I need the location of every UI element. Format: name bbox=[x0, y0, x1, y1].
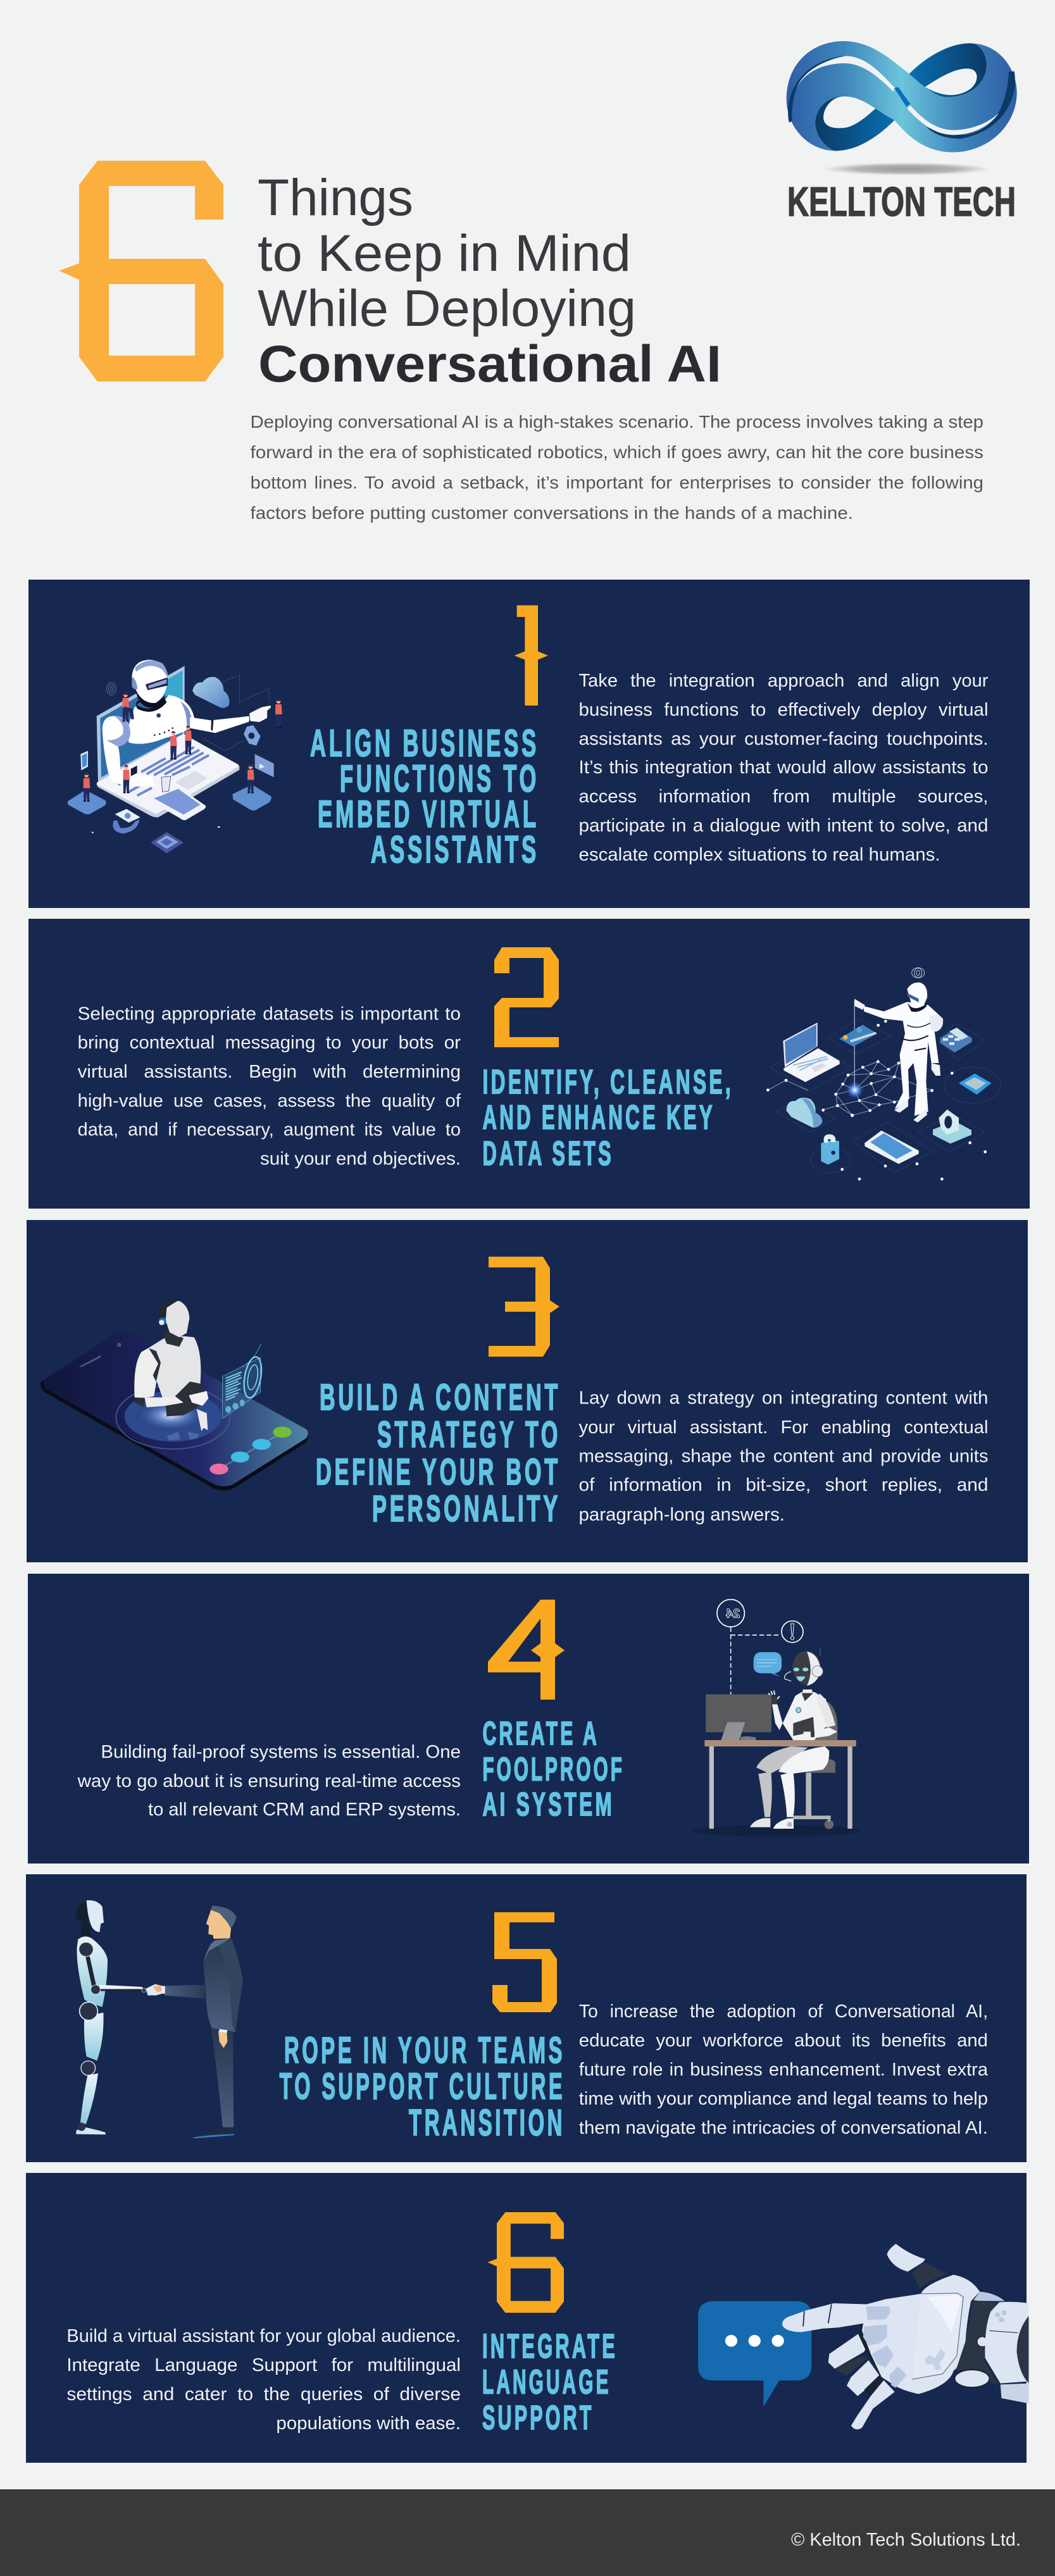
heading 6 bbox=[482, 2327, 618, 2437]
title: Conversational AI bbox=[258, 335, 721, 393]
intro paragraph: forward in the era of sophisticated robotics, which if goes awry, can hit the core business bbox=[251, 442, 983, 462]
body text 4: Building fail-proof systems is essential. One bbox=[101, 1742, 461, 1762]
heading 5: ROPE IN YOUR TEAMS bbox=[284, 2030, 565, 2071]
icon: robot hand bbox=[782, 2244, 1028, 2429]
illustration: robot at desk bbox=[692, 1600, 861, 1837]
illustration: robot with data network bbox=[766, 968, 1001, 1181]
panel 3: build a content strategy bbox=[27, 1220, 1028, 1562]
body text 2 bbox=[78, 1004, 461, 1169]
body text 2: bring contextual messaging to your bots or bbox=[78, 1033, 461, 1053]
body text 5: future role in business enhancement. Invest extra bbox=[579, 2060, 989, 2080]
heading 3: DEFINE YOUR BOT bbox=[316, 1452, 561, 1493]
heading 1 bbox=[310, 722, 539, 871]
body text 2: suit your end objectives. bbox=[260, 1149, 461, 1169]
intro paragraph: factors before putting customer conversations in the hands of a machine. bbox=[251, 503, 853, 523]
body text 3: messaging, shape the content and provide units bbox=[578, 1447, 989, 1467]
body text 1: It’s this integration that would allow assistants to bbox=[578, 757, 989, 778]
body text 3: Lay down a strategy on integrating content with bbox=[578, 1388, 989, 1409]
logo shadow bbox=[823, 163, 990, 175]
number 4 bbox=[488, 1600, 565, 1700]
heading 4: FOOLPROOF bbox=[482, 1752, 625, 1788]
footer bbox=[0, 2489, 1055, 2576]
body text 5 bbox=[579, 2001, 989, 2138]
body text 6: Integrate Language Support for multilingual bbox=[66, 2355, 461, 2375]
heading 3 bbox=[316, 1377, 561, 1529]
body text 2: high-value use cases, assess the quality of bbox=[78, 1091, 461, 1111]
body text 1: assistants as your customer-facing touchpoints. bbox=[578, 729, 989, 749]
heading 1: ALIGN BUSINESS bbox=[310, 722, 539, 764]
body text 2: data, and if necessary, augment its value to bbox=[78, 1120, 461, 1140]
illustration: robot on smartphone bbox=[41, 1300, 308, 1490]
heading 1: EMBED VIRTUAL bbox=[318, 793, 539, 835]
heading 3: BUILD A CONTENT bbox=[320, 1377, 561, 1418]
heading 6: LANGUAGE bbox=[482, 2363, 611, 2401]
illustration: chat bubble and robot hand bbox=[698, 2244, 1028, 2429]
heading 2 bbox=[482, 1063, 734, 1173]
heading 4: AI SYSTEM bbox=[482, 1786, 615, 1823]
title: to Keep in Mind bbox=[258, 225, 631, 282]
body text 3: your virtual assistant. For enabling contextual bbox=[578, 1417, 989, 1438]
heading 6: SUPPORT bbox=[482, 2399, 594, 2437]
title bbox=[258, 169, 721, 393]
body text 4 bbox=[77, 1742, 461, 1820]
body text 4: way to go about it is ensuring real-time access bbox=[77, 1771, 461, 1791]
body text 1: access information from multiple sources, bbox=[578, 787, 989, 807]
title: While Deploying bbox=[258, 280, 636, 337]
body text 3: of information in bit-size, short replies, and bbox=[578, 1475, 989, 1495]
heading 1: ASSISTANTS bbox=[371, 828, 539, 871]
body text 5: time with your compliance and legal teams to help bbox=[579, 2089, 988, 2109]
panel 1: align business functions bbox=[28, 580, 1030, 908]
title: Things bbox=[258, 169, 413, 227]
icon: chat bubble bbox=[698, 2301, 811, 2406]
body text 3: paragraph-long answers. bbox=[578, 1505, 785, 1525]
illustration: robot and businessman handshake bbox=[76, 1900, 242, 2138]
body text 1: escalate complex situations to real humans. bbox=[578, 845, 940, 865]
body text 2: Selecting appropriate datasets is important to bbox=[78, 1004, 461, 1024]
number 6 bbox=[487, 2212, 564, 2313]
illustration: robot at desk: 24 bbox=[726, 1607, 740, 1621]
panel 5: rope in your teams bbox=[26, 1874, 1027, 2162]
big number 6 bbox=[59, 161, 223, 382]
intro paragraph: bottom lines. To avoid a setback, it’s important for enterprises to consider the following bbox=[251, 473, 983, 492]
number 5 bbox=[492, 1912, 557, 2012]
body text 3 bbox=[578, 1388, 989, 1525]
body text 6: settings and cater to the queries of diverse bbox=[66, 2384, 461, 2405]
number 3 bbox=[489, 1257, 559, 1357]
body text 5: To increase the adoption of Conversational AI, bbox=[579, 2001, 988, 2022]
panel 4: create a foolproof AI system bbox=[28, 1574, 1029, 1864]
body text 6: Build a virtual assistant for your global audience. bbox=[66, 2326, 461, 2346]
body text 1: business functions to effectively deploy virtual bbox=[578, 700, 989, 720]
logo: Kellton Tech bbox=[787, 41, 1017, 225]
heading 4 bbox=[482, 1715, 625, 1823]
heading 1: FUNCTIONS TO bbox=[340, 757, 539, 800]
panel 6: integrate language support bbox=[26, 2173, 1028, 2463]
body text 5: them navigate the intricacies of conversational AI. bbox=[579, 2118, 988, 2138]
body text 6: populations with ease. bbox=[276, 2413, 461, 2434]
illustration: robot emerging from laptop bbox=[68, 660, 282, 853]
number 1 bbox=[515, 606, 548, 706]
heading 2: DATA SETS bbox=[482, 1135, 614, 1173]
heading 3: STRATEGY TO bbox=[377, 1414, 561, 1455]
body text 1: participate in a dialogue with intent to solve, and bbox=[578, 816, 989, 836]
intro paragraph bbox=[251, 412, 983, 523]
panel 2: identify, cleanse and enhance bbox=[28, 919, 1030, 1209]
logo mark: infinity bbox=[787, 41, 1017, 152]
heading 6: INTEGRATE bbox=[482, 2327, 618, 2365]
body text 5: educate your workforce about its benefits and bbox=[579, 2031, 988, 2051]
body text 4: to all relevant CRM and ERP systems. bbox=[148, 1800, 461, 1820]
body text 2: virtual assistants. Begin with determining bbox=[78, 1062, 461, 1082]
body text 1 bbox=[578, 671, 989, 865]
body text 6 bbox=[66, 2326, 461, 2434]
intro paragraph: Deploying conversational AI is a high-stakes scenario. The process involves taking a step bbox=[251, 412, 983, 432]
heading 5: TO SUPPORT CULTURE bbox=[280, 2066, 565, 2107]
body text 1: Take the integration approach and align your bbox=[578, 671, 989, 691]
copyright: © Kelton Tech Solutions Ltd. bbox=[791, 2530, 1021, 2550]
heading 5: TRANSITION bbox=[409, 2102, 565, 2144]
heading 2: AND ENHANCE KEY bbox=[482, 1098, 715, 1136]
heading 3: PERSONALITY bbox=[372, 1488, 561, 1529]
heading 4: CREATE A bbox=[482, 1715, 599, 1752]
heading 5 bbox=[280, 2030, 565, 2144]
heading 2: IDENTIFY, CLEANSE, bbox=[482, 1063, 734, 1101]
number 2 bbox=[494, 947, 559, 1047]
